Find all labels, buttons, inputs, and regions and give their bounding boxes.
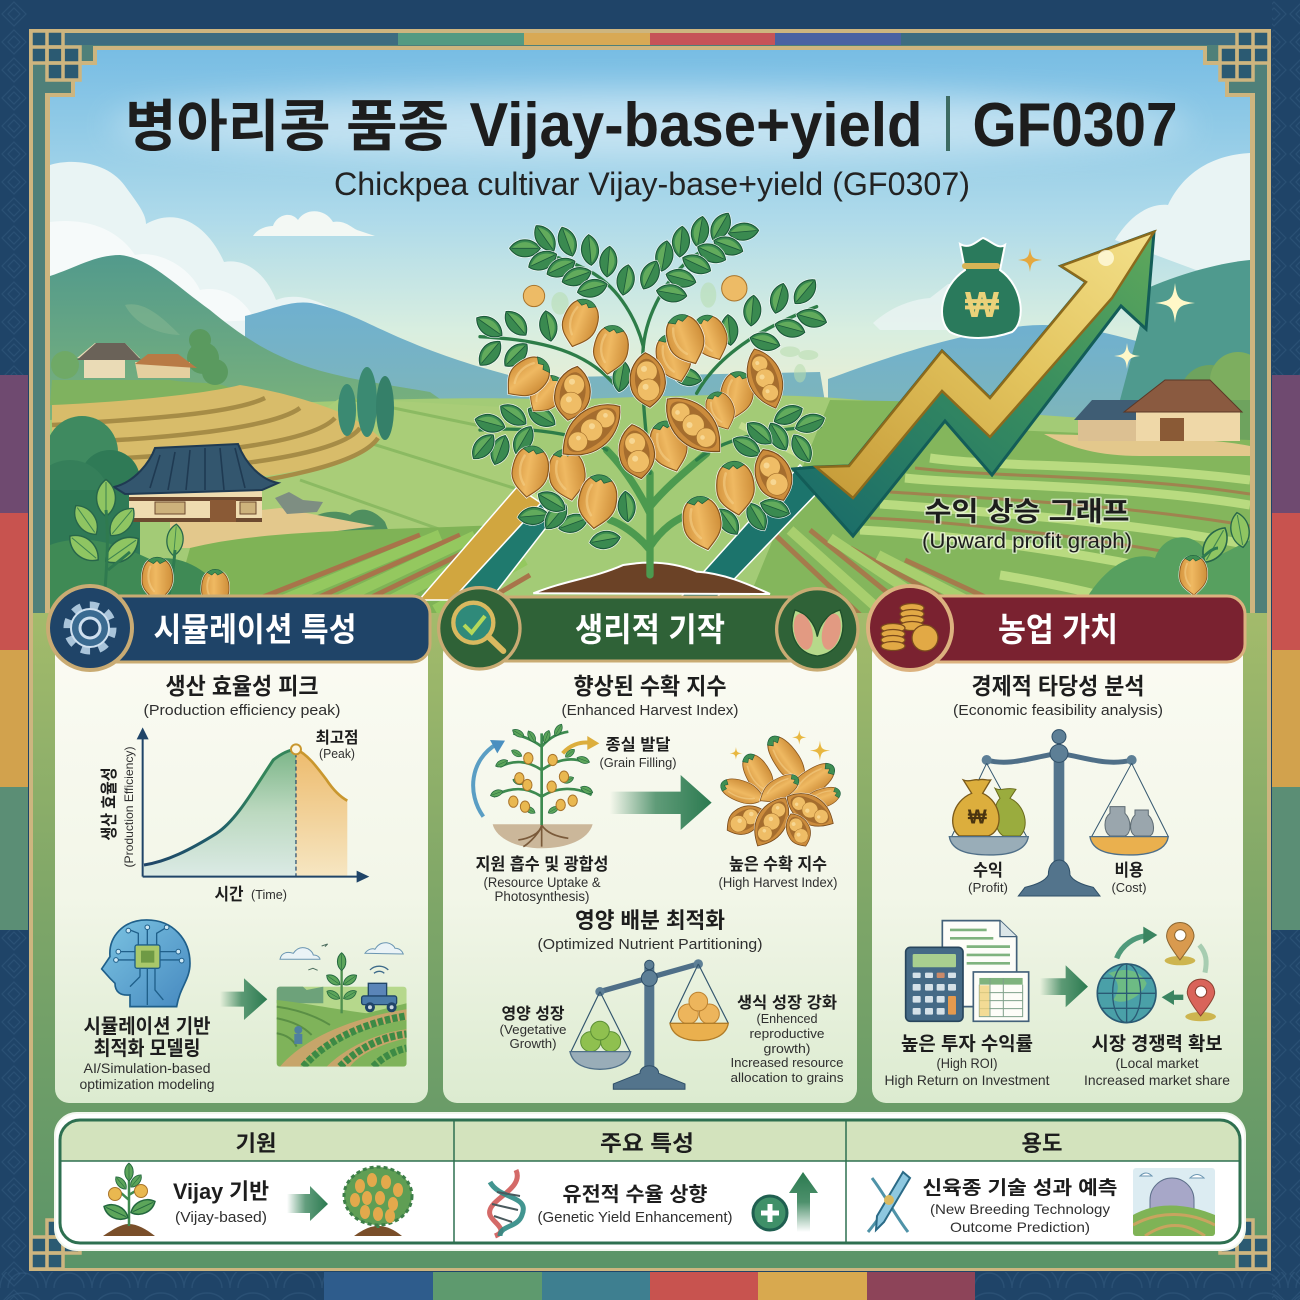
- text: ROI and market competitiveness: 시장 경쟁력 확보: [1092, 1033, 1222, 1055]
- soil: [533, 563, 770, 594]
- diagram labels: 지원 흡수 및 광합성: [476, 855, 608, 874]
- chart labels: [100, 729, 358, 904]
- heading: enhanced harvest index: [562, 673, 738, 719]
- clouds: [50, 153, 1250, 336]
- upward profit arrow: [419, 232, 1195, 600]
- heading: economic feasibility: 경제적 타당성 분석: [972, 673, 1144, 699]
- cell: key traits: (Genetic Yield Enhancement): [538, 1210, 732, 1226]
- cell: origin: Vijay 기반: [173, 1179, 269, 1204]
- chickpea pods: [498, 276, 800, 553]
- text: ROI and market competitiveness: 높은 투자 수익률: [901, 1033, 1033, 1055]
- cell: origin: (Vijay-based): [175, 1210, 267, 1226]
- summary table: [55, 1113, 1245, 1250]
- scenery illustration: [30, 50, 1266, 640]
- chart labels: (Time): [251, 887, 287, 902]
- icon: money bag: ₩: [965, 284, 999, 325]
- diagram labels: (Grain Filling): [600, 756, 676, 770]
- scale labels: [500, 994, 844, 1085]
- heading: economic feasibility: [953, 673, 1163, 719]
- panel: physiological mechanism: [439, 588, 858, 1103]
- diagram labels: Photosynthesis): [494, 889, 590, 904]
- title: 병아리콩 품종: [125, 95, 449, 158]
- scale labels: [968, 861, 1146, 895]
- heading: (Production efficiency peak): [144, 702, 340, 719]
- heading: enhanced harvest index: (Enhanced Harvest Index): [562, 703, 738, 719]
- column heads: [236, 1131, 1062, 1156]
- cell: key traits: [490, 1170, 818, 1236]
- panel: simulation characteristics: [48, 586, 430, 1103]
- heading: optimized nutrient partitioning: [538, 908, 762, 953]
- text: simulation-based optimization modeling: AI/Simulation-based: [84, 1060, 210, 1076]
- icon: money bag: [942, 238, 1021, 338]
- diagram labels: 종실 발달: [606, 736, 671, 754]
- diagram labels: [476, 736, 838, 904]
- chickpea plant: [467, 209, 829, 594]
- text: simulation-based optimization modeling: [80, 1015, 214, 1092]
- line chart: production efficiency peak: [137, 727, 369, 883]
- graph caption: [922, 497, 1132, 553]
- title: Vijay-base+yield: [470, 91, 922, 160]
- icons: magnifier and seed: [439, 588, 858, 670]
- diagram: plant to harvest: [473, 723, 843, 853]
- scale labels: (Cost): [1112, 880, 1146, 895]
- icon: profit and cost scale: [949, 730, 1168, 896]
- scale labels: Growth): [510, 1036, 556, 1051]
- text: ROI and market competitiveness: (High ROI): [936, 1055, 998, 1071]
- chart labels: 시간: [214, 885, 244, 904]
- lower green frame: [33, 613, 1267, 1268]
- scale labels: Increased resource: [730, 1055, 844, 1070]
- column heads: 기원: [236, 1131, 276, 1156]
- chart labels: (Production Efficiency): [122, 746, 136, 868]
- scale labels: reproductive: [750, 1026, 824, 1041]
- diagram labels: (High Harvest Index): [718, 875, 838, 890]
- subtitle: Chickpea cultivar Vijay-base+yield (GF0307): [334, 166, 970, 202]
- right fields and farmhouses: [740, 352, 1266, 620]
- icon: profit and cost scale: ₩: [968, 806, 987, 828]
- header bar: 농업 가치: [998, 611, 1118, 648]
- scale labels: allocation to grains: [730, 1070, 844, 1085]
- graph caption: (Upward profit graph): [922, 530, 1132, 553]
- header bar: [868, 586, 1245, 670]
- text: ROI and market competitiveness: (Local market: [1116, 1055, 1199, 1071]
- scale labels: 생식 성장 강화: [737, 994, 837, 1012]
- mountains: [50, 255, 1250, 430]
- text: ROI and market competitiveness: [884, 1033, 1230, 1088]
- text: ROI and market competitiveness: Increased market share: [1084, 1072, 1230, 1088]
- chart labels: (Peak): [319, 746, 355, 761]
- graph caption: 수익 상승 그래프: [924, 497, 1130, 527]
- icon: tilted balance scale: [570, 959, 728, 1089]
- heading: optimized nutrient partitioning: 영양 배분 최적화: [575, 908, 725, 933]
- heading: economic feasibility: (Economic feasibility analysis): [953, 702, 1163, 719]
- scale labels: (Enhenced: [756, 1011, 818, 1026]
- header bar: 생리적 기작: [575, 611, 725, 648]
- header bar: [480, 597, 820, 661]
- diagram labels: 높은 수확 지수: [729, 855, 827, 874]
- chart labels: 생산 효율성: [100, 768, 119, 840]
- cell: key traits: 유전적 수율 상향: [562, 1183, 708, 1206]
- cell: uses: (New Breeding Technology: [930, 1201, 1110, 1217]
- chart labels: 최고점: [316, 729, 358, 747]
- heading: enhanced harvest index: 향상된 수확 지수: [574, 673, 726, 699]
- scale labels: 영양 성장: [502, 1005, 565, 1023]
- header bar: 시뮬레이션 특성: [154, 611, 356, 648]
- text: simulation-based optimization modeling: 최적화 모델링: [94, 1037, 200, 1060]
- scale labels: (Profit): [968, 880, 1008, 895]
- column heads: 주요 특성: [600, 1131, 694, 1156]
- heading: [144, 673, 340, 719]
- icon: calculator, documents and market globe: [906, 921, 1216, 1023]
- left terraced hills and fields: [50, 329, 532, 613]
- text: simulation-based optimization modeling: optimization modeling: [80, 1076, 214, 1092]
- title: GF0307: [972, 91, 1178, 160]
- scale labels: (Vegetative: [500, 1022, 566, 1037]
- text: simulation-based optimization modeling: 시뮬레이션 기반: [84, 1015, 210, 1038]
- scale labels: 비용: [1114, 861, 1144, 880]
- cell: uses: Outcome Prediction): [950, 1219, 1090, 1235]
- title: [110, 91, 1190, 160]
- scale labels: 수익: [973, 861, 1003, 880]
- heading: optimized nutrient partitioning: (Optimized Nutrient Partitioning): [538, 936, 762, 953]
- panel: agricultural value: [868, 586, 1245, 1103]
- cell: uses: 신육종 기술 성과 예측: [922, 1177, 1118, 1199]
- scale labels: growth): [764, 1041, 810, 1056]
- cell: uses: [868, 1168, 1215, 1236]
- heading: 생산 효율성 피크: [166, 673, 318, 699]
- text: ROI and market competitiveness: High Return on Investment: [884, 1072, 1050, 1088]
- cell: origin: [101, 1163, 412, 1236]
- rolling ground: [50, 395, 1078, 596]
- icon: AI head to farm: [102, 920, 407, 1067]
- diagram labels: (Resource Uptake &: [484, 875, 600, 890]
- column heads: 용도: [1022, 1131, 1062, 1156]
- header bar: [48, 586, 430, 670]
